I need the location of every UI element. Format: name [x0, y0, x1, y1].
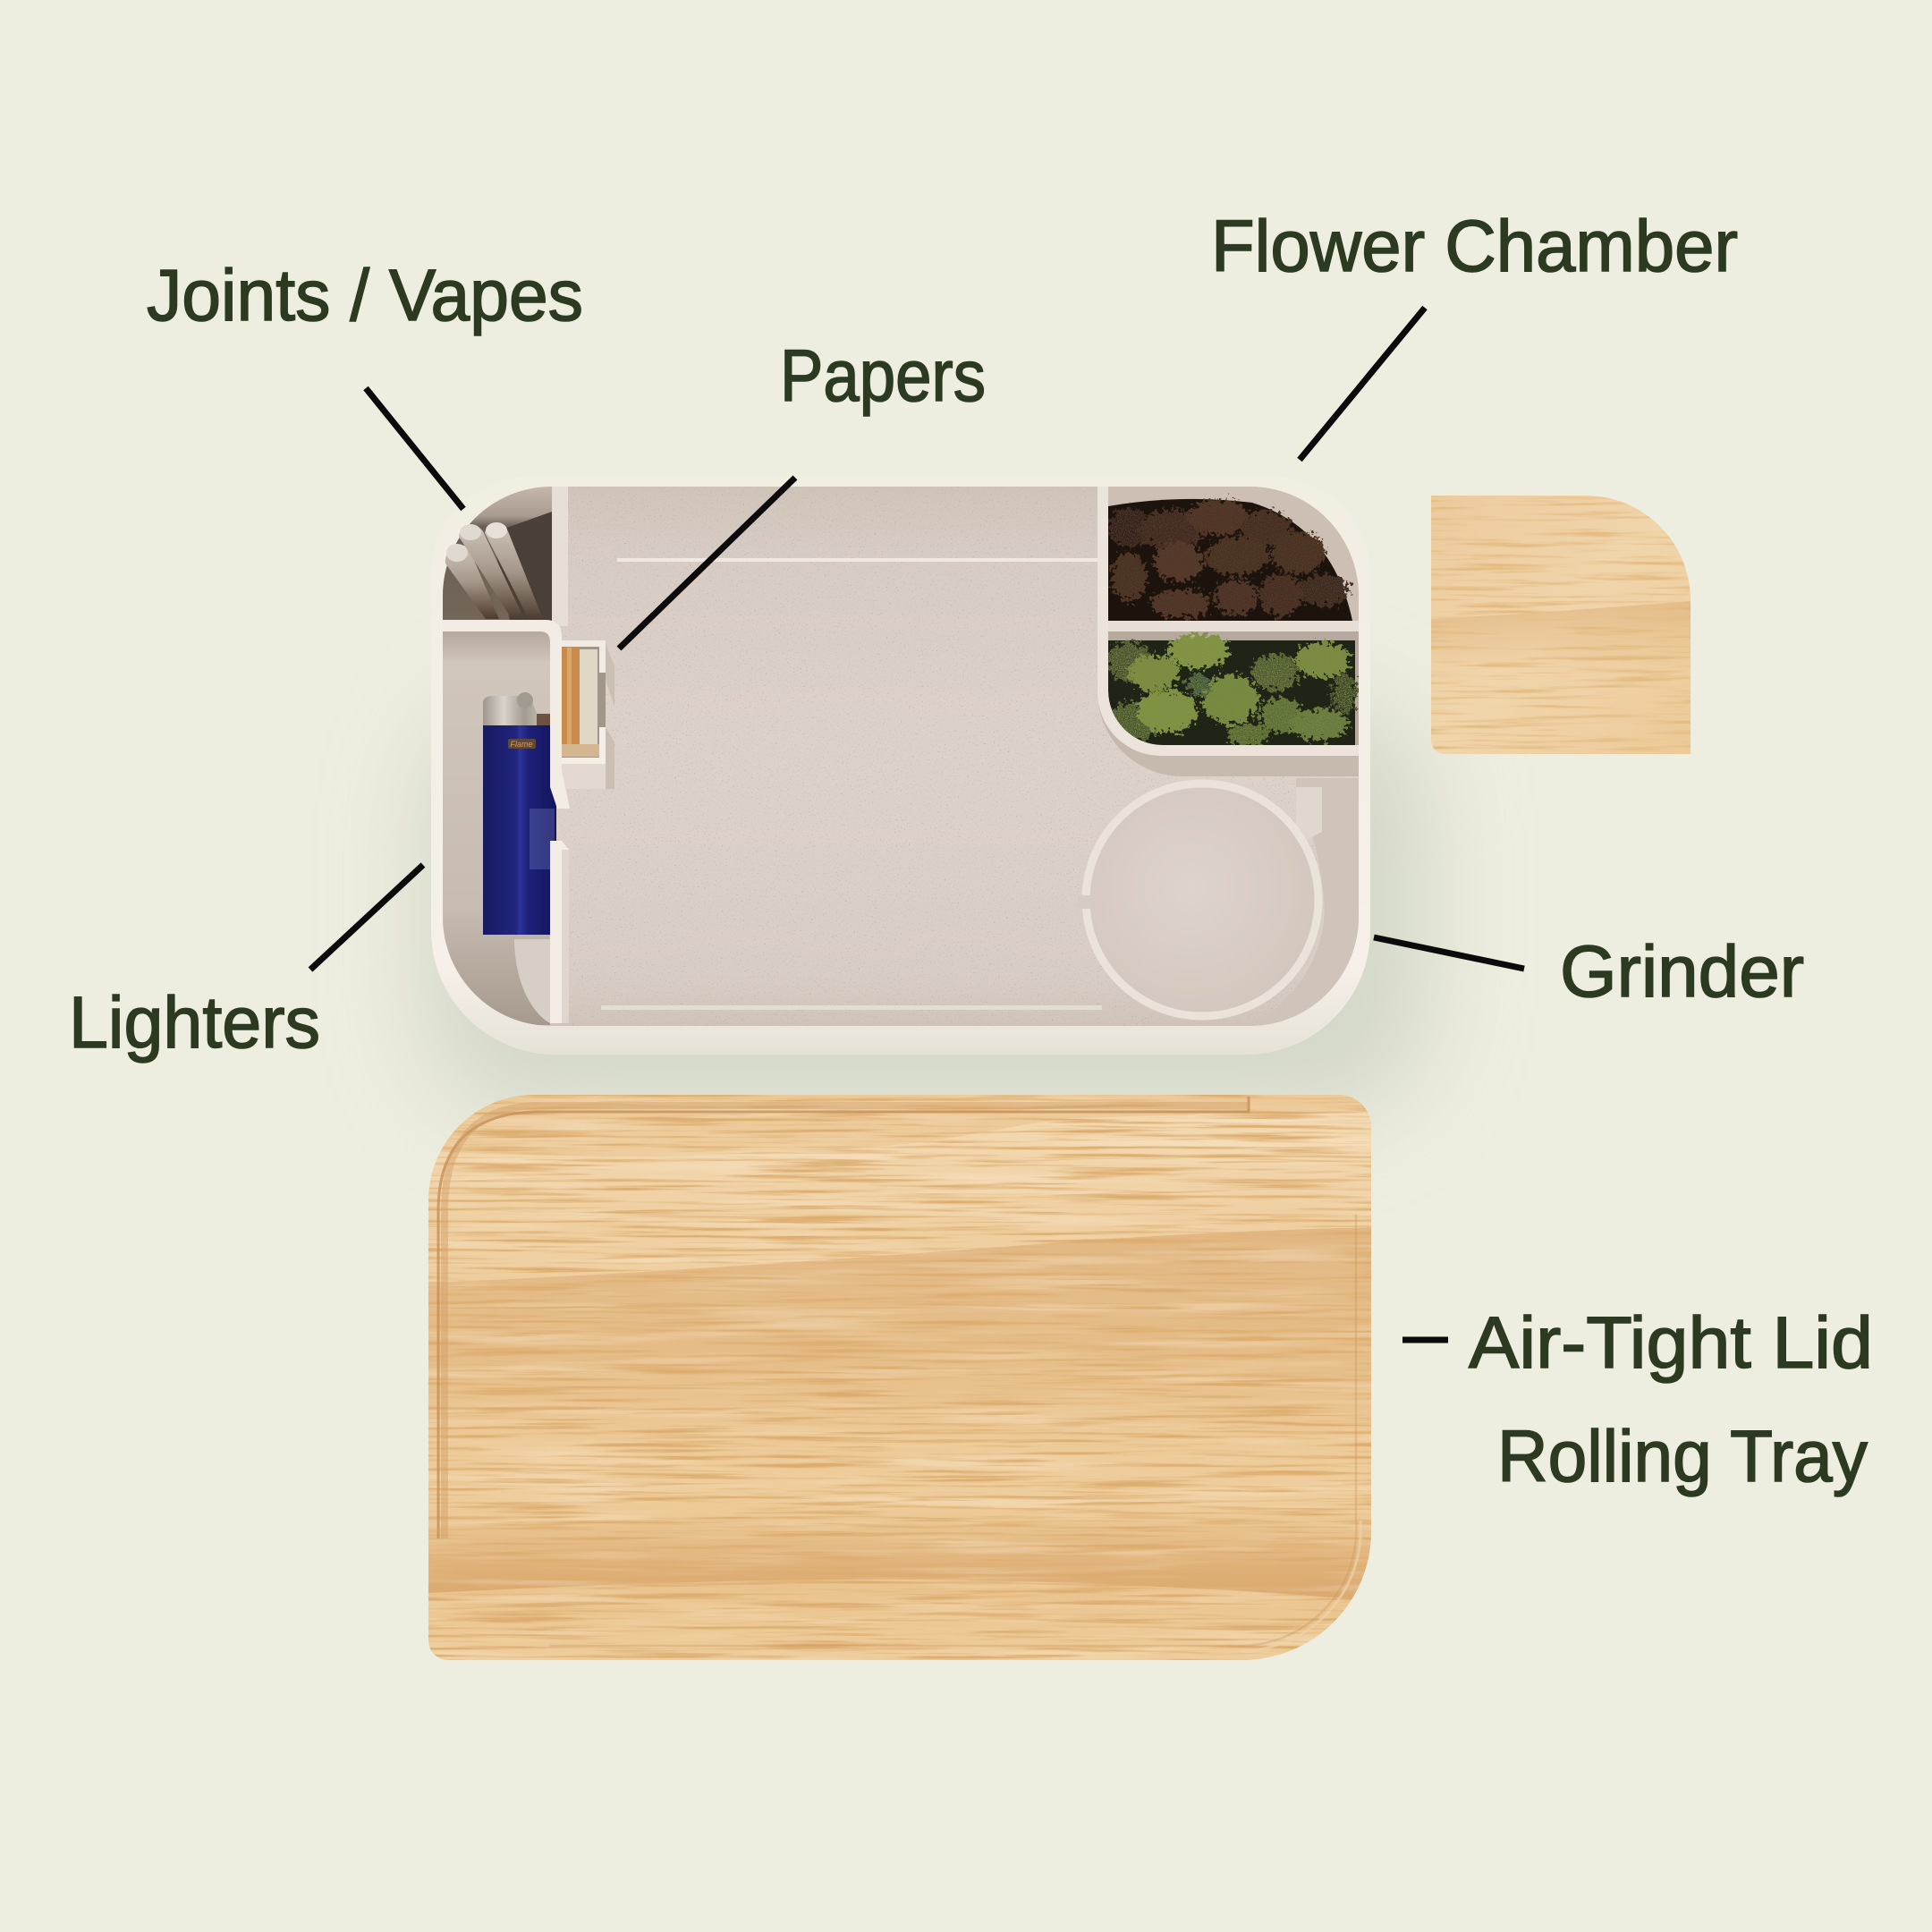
flower chamber shadow [1097, 689, 1359, 776]
rolling papers [562, 648, 580, 744]
arrow: papers leader [619, 478, 795, 648]
arrow: grinder leader [1374, 937, 1524, 969]
panel: air-tight lid rolling tray [428, 1095, 1371, 1660]
papers holder [562, 640, 614, 789]
panel: storage box [431, 477, 1370, 1055]
right aisle shade [1252, 778, 1359, 1026]
tray groove [438, 1097, 1360, 1651]
label: joints / vapes: Joints / Vapes [147, 255, 583, 336]
lighter chamber [443, 631, 550, 1025]
tray shape [428, 1095, 1371, 1660]
grinder ring [1078, 784, 1318, 1016]
label: papers: Papers [780, 335, 986, 417]
label: rolling tray: Rolling Tray [1497, 1416, 1868, 1497]
box floor and chambers [443, 487, 1359, 1026]
arrow: air-tight lid leader [1402, 1336, 1448, 1343]
small lid wood grain [1431, 496, 1690, 754]
small lid shape [1431, 496, 1690, 754]
small lid darker band [1431, 601, 1690, 680]
green flower compartment [1105, 631, 1359, 746]
icon: lighter [483, 692, 556, 935]
flower chamber divider [1108, 621, 1359, 631]
tray broad tone bands [428, 1109, 1371, 1601]
arrow: flower chamber leader [1300, 308, 1425, 460]
label: grinder: Grinder [1560, 931, 1804, 1013]
flower chamber wall [1097, 487, 1359, 756]
box wall: joints divider [552, 487, 568, 626]
lighter brand label: Flame [510, 740, 533, 749]
arrow: joints / vapes leader [366, 388, 463, 509]
label: flower chamber: Flower Chamber [1211, 206, 1738, 287]
label: lighters: Lighters [69, 982, 320, 1063]
label: air-tight lid: Air-Tight Lid [1469, 1302, 1873, 1384]
lighter chamber wall [443, 620, 570, 809]
arrow: lighters leader [310, 865, 423, 970]
icon: three joints [445, 522, 543, 619]
panel: small wooden lid [1431, 496, 1690, 754]
tray fine grain [428, 1095, 1371, 1660]
lower divider wall [550, 841, 569, 1023]
joints chamber [443, 487, 552, 621]
tray wood grain [428, 1095, 1371, 1660]
flower chamber [1097, 487, 1359, 776]
dried flower compartment [1107, 487, 1359, 621]
box outer shell [431, 477, 1370, 1055]
floor highlight lines [617, 558, 1097, 562]
box drop shadow [420, 698, 1431, 1118]
